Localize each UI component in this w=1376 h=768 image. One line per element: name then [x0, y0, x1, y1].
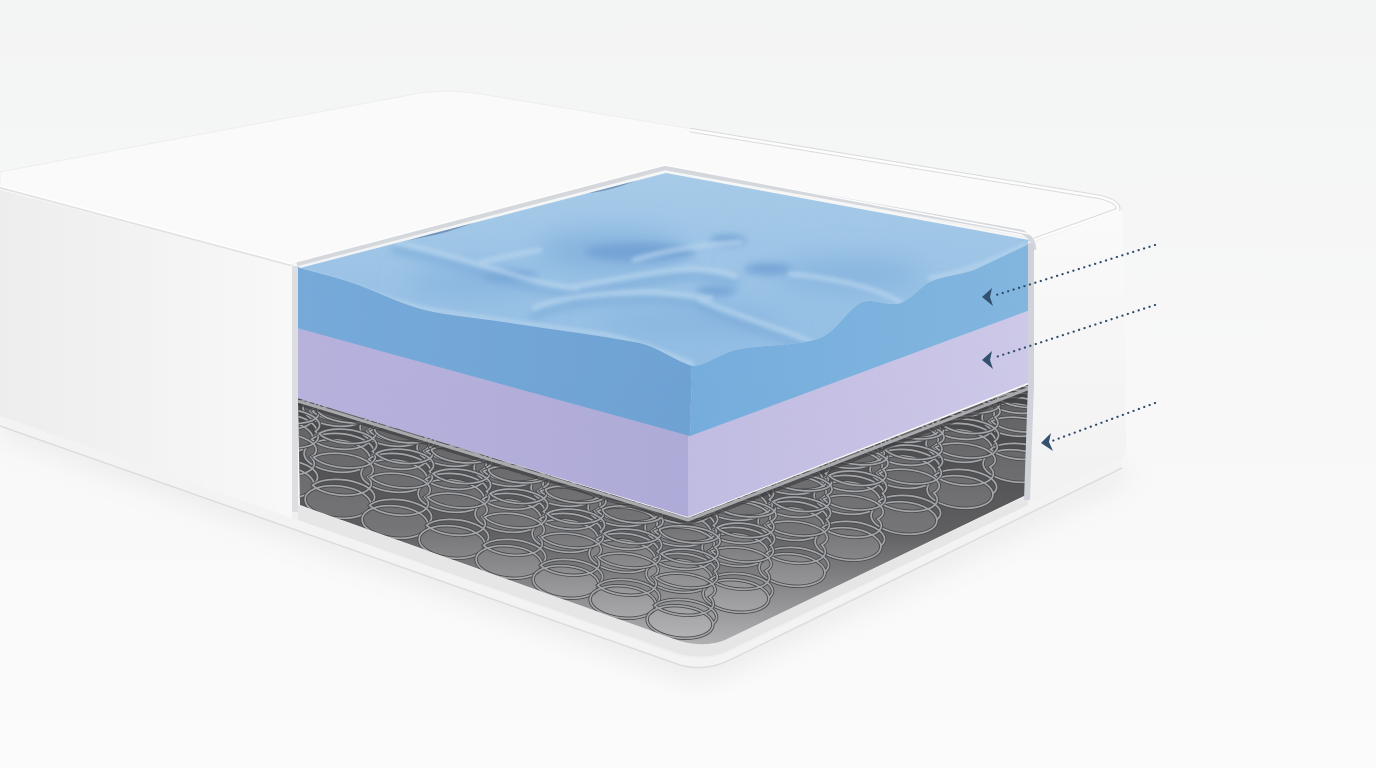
dimples [482, 235, 792, 296]
right rim [1027, 244, 1031, 500]
base band edge [0, 426, 1122, 668]
right side face [1025, 210, 1126, 506]
top left seam [0, 187, 292, 265]
foam grain [290, 165, 1040, 525]
blue front-left face [297, 266, 692, 436]
ridge highlights [300, 242, 1025, 364]
crease shadows [391, 246, 803, 344]
blue foam layer [298, 173, 1030, 436]
purple front-left face [297, 325, 690, 517]
back edge shadows [411, 180, 636, 240]
spring layer [298, 384, 1028, 644]
arrowhead [982, 288, 993, 306]
dotted leader [1052, 403, 1155, 441]
arrow: middle foam layer [982, 305, 1155, 369]
dotted leader [993, 245, 1155, 296]
spring cavity [296, 380, 1032, 650]
purple front-right face [688, 308, 1030, 517]
soft valley shading [405, 234, 925, 332]
mattress shell [0, 91, 1126, 668]
coil springs [246, 275, 1062, 642]
arrow: top foam layer [982, 245, 1155, 306]
base band inner area [298, 495, 1028, 657]
mattress cutaway illustration [0, 91, 1156, 674]
left rim [292, 266, 298, 512]
metal support bar [298, 388, 1030, 520]
metal support bar shadow [298, 391, 1030, 523]
dotted leader [993, 305, 1155, 358]
back seam highlight [690, 130, 1118, 240]
purple foam layer [297, 308, 1030, 517]
back seam line [690, 130, 1118, 240]
arrow: spring layer [1041, 403, 1155, 451]
blue wavy top surface [295, 170, 1035, 370]
blue front-right face [690, 243, 1030, 436]
arrowhead [1041, 433, 1053, 451]
left side face [0, 190, 292, 520]
base band [0, 416, 1122, 668]
top left seam highlight [0, 186, 292, 264]
cutout rim [295, 165, 1034, 512]
top rim grey [297, 168, 1034, 264]
top rim highlight [295, 165, 1030, 262]
mattress top surface [0, 91, 1122, 265]
top base [295, 170, 1035, 370]
arrowhead [982, 351, 993, 369]
floor shadow [0, 410, 1130, 678]
